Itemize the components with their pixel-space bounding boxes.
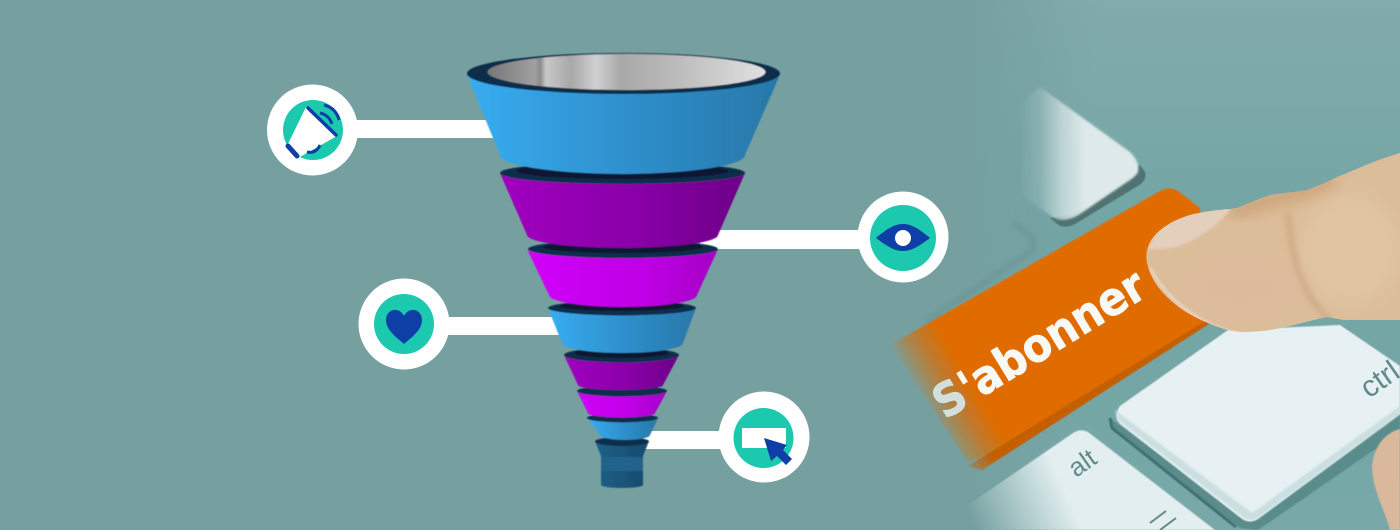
key marks — [1150, 511, 1176, 530]
funnel segment 1: blue with metal opening — [467, 53, 780, 174]
connector bars — [345, 120, 870, 449]
funnel segment 3: magenta — [527, 240, 718, 307]
funnel — [467, 53, 780, 488]
funnel segment 7: blue — [587, 414, 658, 440]
fingernail — [1148, 207, 1232, 249]
icon: heart — [358, 278, 450, 370]
funnel spout — [595, 437, 649, 488]
key label: S'abonner: S'abonner — [923, 258, 1156, 429]
photo: keyboard background — [974, 0, 1400, 530]
big ctrl key — [1110, 325, 1400, 530]
ghost key left of the orange key — [925, 222, 1033, 322]
icon: click cursor — [718, 392, 810, 482]
top white key — [1005, 87, 1146, 227]
funnel segment 5: purple — [564, 348, 679, 390]
orange subscribe key — [890, 188, 1212, 470]
alt key — [945, 430, 1215, 530]
icon: eye — [858, 192, 948, 282]
key label: alt: alt — [1062, 442, 1103, 483]
second finger bottom right — [1372, 429, 1400, 530]
finger pressing the key — [1140, 150, 1400, 335]
funnel segment 6: magenta — [577, 386, 667, 418]
icon: megaphone — [267, 84, 358, 176]
funnel segment 4: blue — [548, 300, 696, 353]
funnel segment 2: purple — [500, 162, 745, 248]
